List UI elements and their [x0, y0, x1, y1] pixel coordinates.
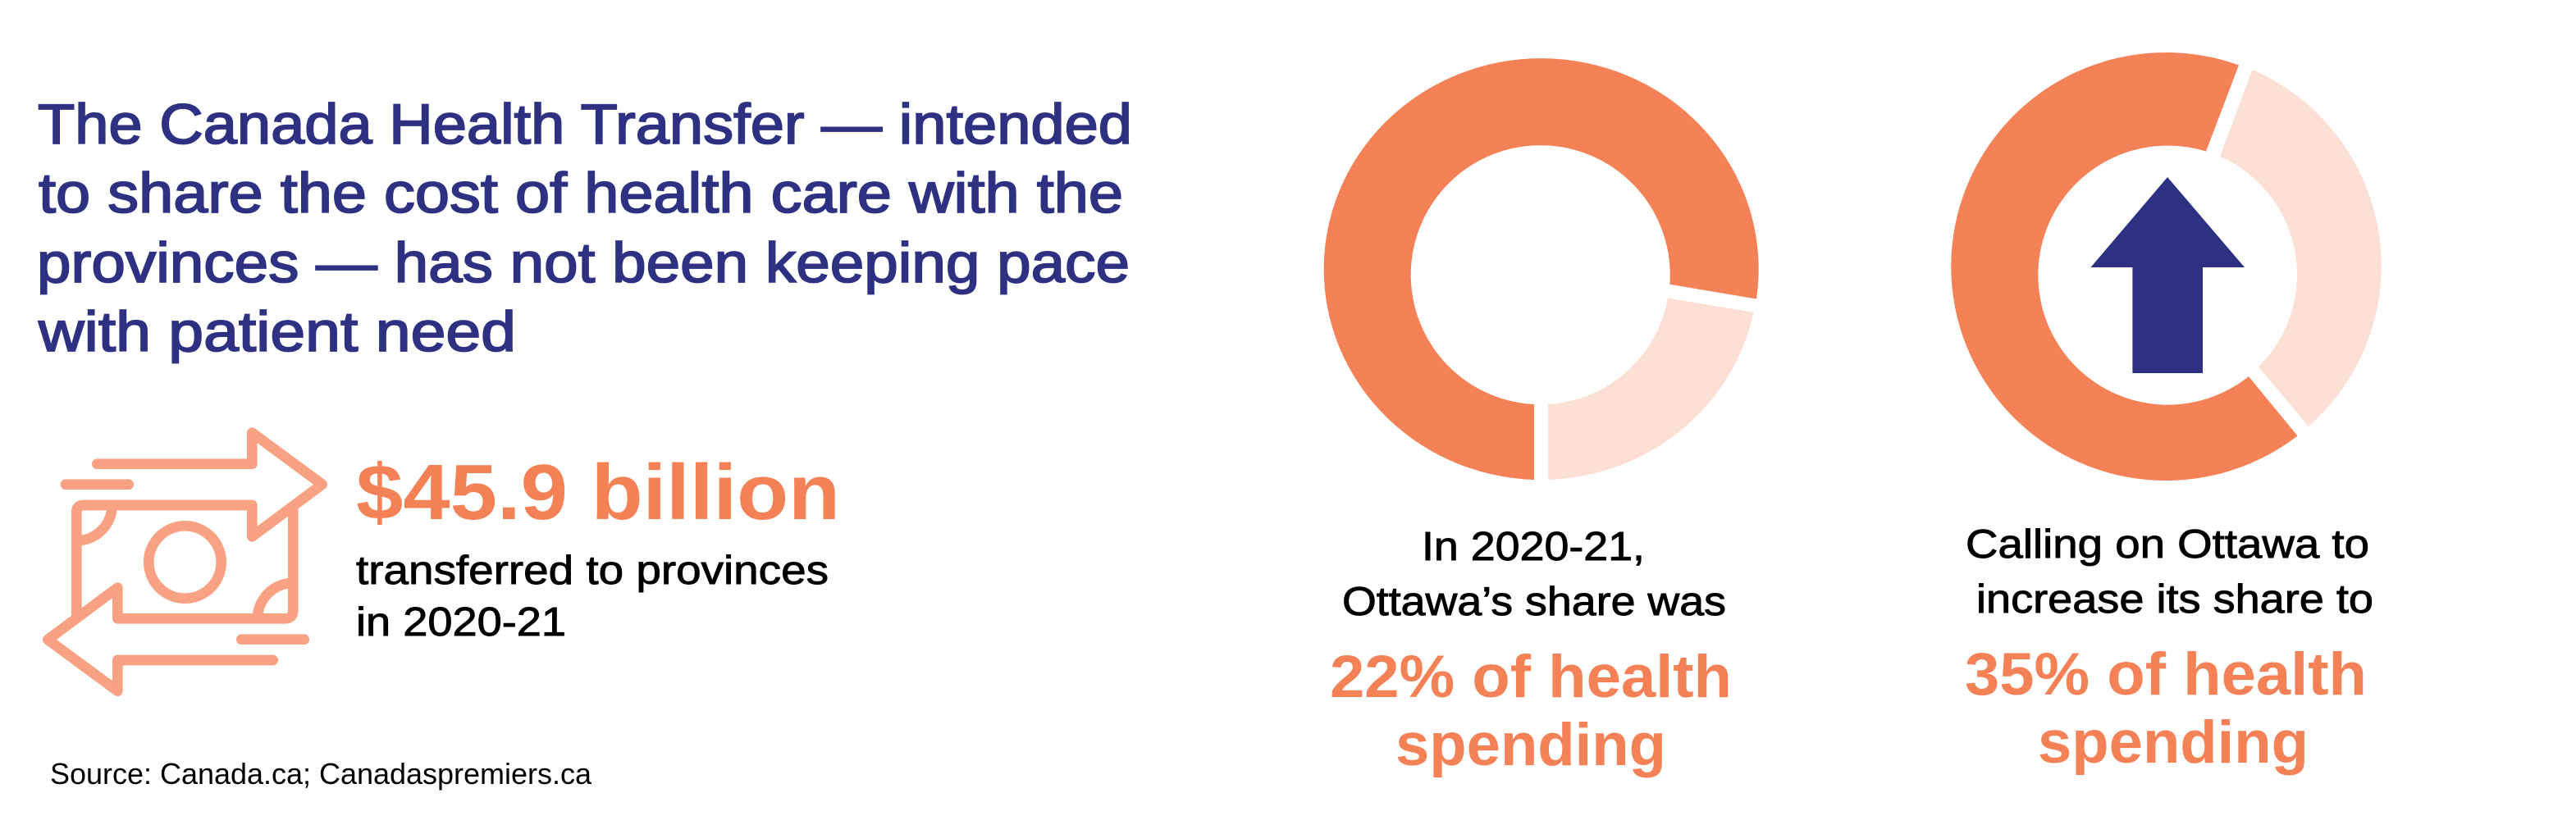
text: requested share label: [1966, 522, 2373, 622]
title: provinces — has not been keeping pace: [37, 231, 1130, 294]
stat: 35% of health spending: 35% of health: [1965, 641, 2367, 708]
title: [37, 93, 1132, 363]
text: current share label: Ottawa’s share was: [1342, 580, 1726, 624]
text: current share label: In 2020-21,: [1422, 525, 1645, 569]
donut chart: 35% share: [1951, 52, 2382, 481]
stat: 22% of health spending: [1330, 644, 1732, 778]
text: requested share label: Calling on Ottawa to: [1966, 522, 2369, 567]
icon: up arrow: [2090, 177, 2245, 373]
stat: amount transferred: $45.9 billion: [356, 449, 840, 536]
text: stat description: in 2020-21: [356, 600, 566, 645]
title: with patient need: [38, 300, 516, 363]
text: requested share label: increase its share to: [1976, 577, 2373, 622]
icon: money transfer arrows: [48, 433, 322, 691]
source note: Source: Canada.ca; Canadaspremiers.ca: [50, 757, 592, 791]
text: stat description: transferred to provinces: [356, 549, 829, 593]
stat: 22% of health spending: spending: [1395, 712, 1666, 778]
text: current share label: [1342, 525, 1726, 624]
donut chart: 22% share: [1324, 58, 1759, 480]
title: The Canada Health Transfer — intended: [38, 93, 1132, 156]
stat: 35% of health spending: [1965, 641, 2367, 776]
title: to share the cost of health care with the: [39, 162, 1123, 225]
text: stat description: [356, 549, 829, 645]
stat: 22% of health spending: 22% of health: [1330, 644, 1732, 710]
stat: 35% of health spending: spending: [2038, 709, 2309, 776]
